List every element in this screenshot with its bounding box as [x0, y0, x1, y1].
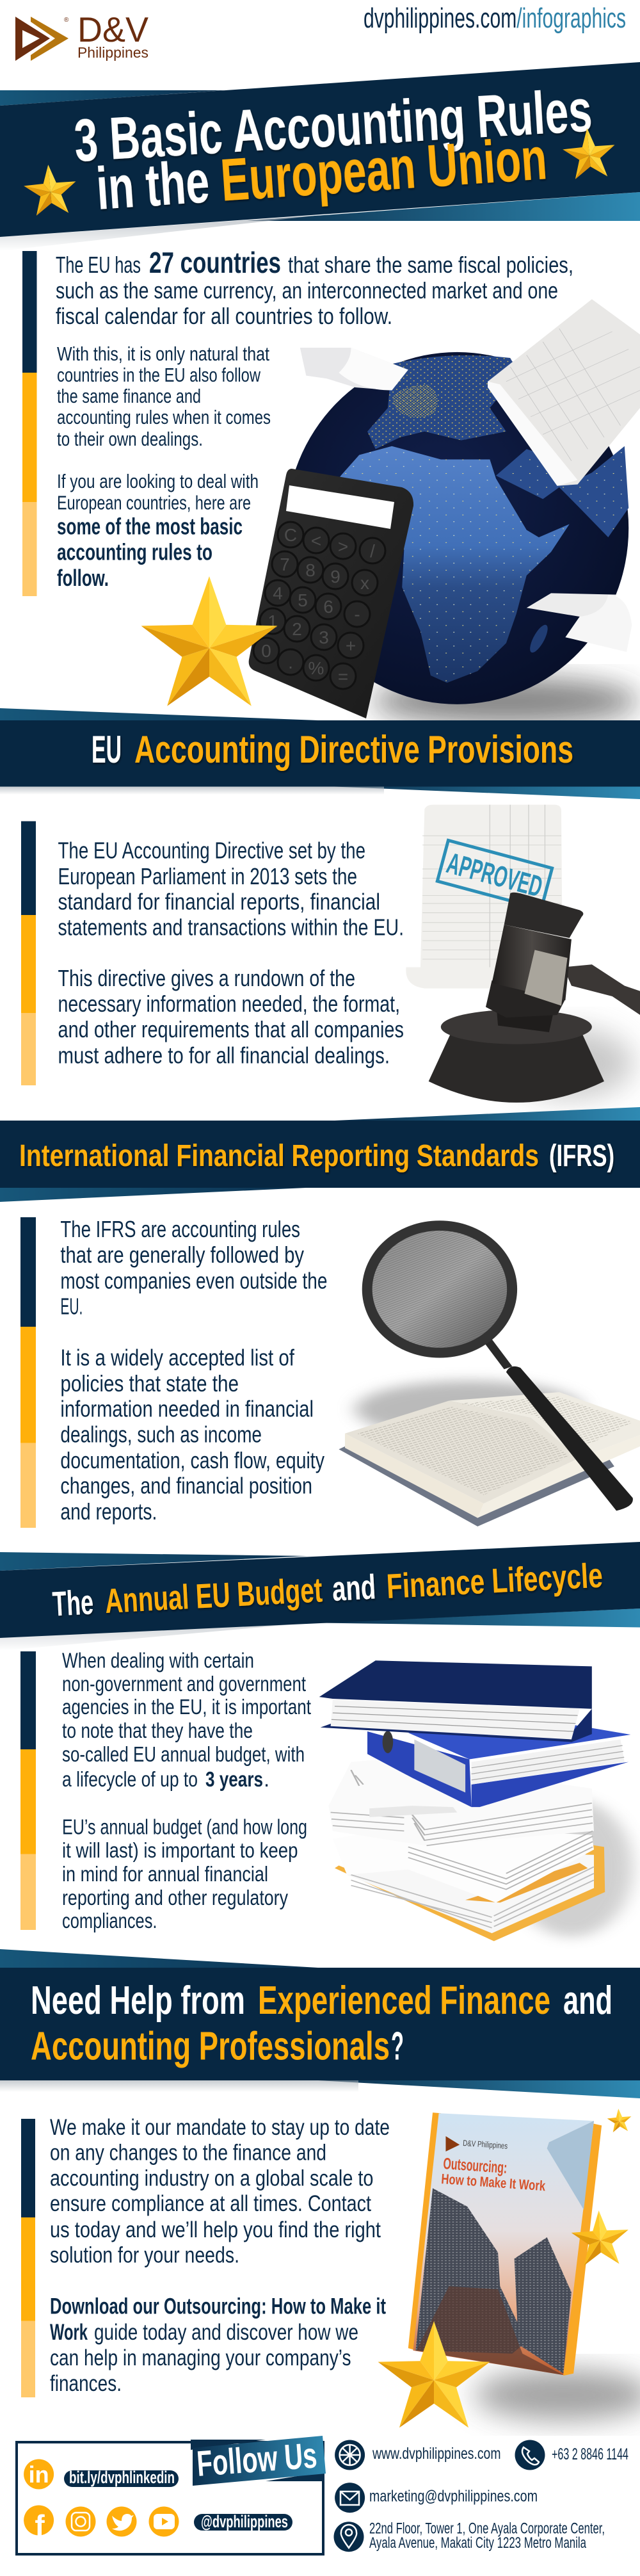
- illustration: guide book cover: [408, 2112, 640, 2420]
- illustration: stacked binders and papers: [319, 1660, 633, 1941]
- follow us box: [17, 2434, 326, 2554]
- heading: Annual EU Budget and Finance Lifecycle: [51, 1556, 604, 1624]
- linkedin link pill: bit.ly/dvphlinkedin: [69, 2468, 175, 2487]
- intro text: [56, 246, 573, 591]
- section 1 text: statements and transactions within the EU.: [58, 914, 404, 941]
- intro text: to their own dealings.: [57, 428, 203, 450]
- section 2 text: most companies even outside the: [60, 1268, 327, 1293]
- section 2 text: that are generally followed by: [60, 1242, 304, 1268]
- section 3 text: agencies in the EU, it is important: [62, 1695, 311, 1719]
- intro text: European countries, here are: [57, 492, 251, 514]
- heading: Need Help from Experienced Finance and Accounting Professionals?: Accounting Professionals: [31, 2025, 390, 2068]
- section 1 text: standard for financial reports, financial: [58, 889, 380, 914]
- section 3 text: [62, 1648, 311, 1932]
- section 3 text: in mind for annual financial: [62, 1862, 268, 1886]
- navy binder: [319, 1660, 592, 1742]
- contact: email: marketing@dvphilippines.com: [369, 2488, 538, 2506]
- section 1 text: and other requirements that all companies: [58, 1016, 404, 1042]
- section 3 text: compliances.: [62, 1909, 157, 1932]
- contact: email: [335, 2483, 538, 2513]
- book logo text: D&V Philippines: [463, 2138, 508, 2151]
- intro text: accounting rules when it comes: [57, 406, 271, 428]
- section 4 text: solution for your needs.: [50, 2243, 239, 2268]
- heading: Annual EU Budget and Finance Lifecycle: and: [331, 1568, 377, 1608]
- icon: facebook: f: [35, 2509, 45, 2542]
- section 3 text: so-called EU annual budget, with: [62, 1742, 305, 1766]
- calculator: <: [311, 531, 321, 551]
- handle pill: @dvphilippines: [201, 2512, 288, 2531]
- icon: twitter: [106, 2506, 137, 2537]
- section 1 text: necessary information needed, the format,: [58, 991, 400, 1017]
- book title: [441, 2155, 547, 2194]
- section 1 text: European Parliament in 2013 sets the: [58, 863, 357, 889]
- intro text: If you are looking to deal with: [57, 470, 259, 492]
- heading: IFRS: International Financial Reporting Standards: [19, 1139, 539, 1173]
- section 2 text: policies that state the: [60, 1370, 239, 1397]
- section 4 text: guide today and discover how we: [94, 2320, 358, 2345]
- header logo: D&V Philippines: [15, 10, 148, 61]
- section 1 text: must adhere to for all financial dealings.: [58, 1042, 390, 1068]
- heading: Need Help from Experienced Finance and Accounting Professionals?: Need Help from: [31, 1979, 245, 2023]
- section 2 text: changes, and financial position: [60, 1473, 312, 1499]
- blue binder: [367, 1722, 630, 1807]
- calculator: x: [360, 573, 369, 593]
- section 2 text: [60, 1216, 327, 1525]
- intro text: countries in the EU also follow: [57, 364, 260, 386]
- paper top left: [300, 348, 408, 391]
- calculator: C: [284, 525, 297, 545]
- intro text: accounting rules to: [57, 539, 212, 565]
- intro text: The EU has: [56, 252, 141, 278]
- calculator: 8: [305, 560, 316, 580]
- illustration: globe with calculator, papers: [249, 299, 640, 724]
- linkedin link pill: [64, 2468, 179, 2487]
- heading: Annual EU Budget and Finance Lifecycle: The: [51, 1583, 95, 1624]
- handle pill: [194, 2512, 292, 2531]
- calculator: 5: [298, 590, 308, 610]
- heading: EU Accounting Directive Provisions: EU: [92, 728, 122, 771]
- section 3 text: .: [264, 1767, 269, 1791]
- section band: EU Accounting Directive Provisions: [0, 708, 640, 799]
- calculator: 7: [280, 555, 290, 574]
- section 1 text: The EU Accounting Directive set by the: [58, 838, 365, 863]
- illustration: approved document and gavel: [406, 805, 640, 1103]
- approved stamp: [437, 840, 552, 909]
- section 3 text: non-government and government: [62, 1672, 306, 1696]
- calculator: %: [308, 658, 324, 678]
- section 3 text: EU’s annual budget (and how long: [62, 1815, 307, 1838]
- calculator: 4: [273, 583, 283, 603]
- calculator: 3: [319, 628, 329, 647]
- icon: facebook: [24, 2505, 54, 2542]
- section 4 text: accounting industry on a global scale to: [50, 2166, 374, 2191]
- contact: website: www.dvphilippines.com: [372, 2445, 500, 2463]
- section 3 text: it will last) is important to keep: [62, 1838, 298, 1862]
- section 2 text: EU.: [60, 1293, 83, 1320]
- approved stamp: APPROVED: [444, 846, 546, 903]
- section 3 text: reporting and other regulatory: [62, 1886, 288, 1909]
- calculator: .: [288, 652, 293, 672]
- heading: Need Help from Experienced Finance and Accounting Professionals?: [31, 1979, 612, 2068]
- section 4 text: Download our Outsourcing: How to Make it: [50, 2294, 386, 2319]
- icon: instagram: [65, 2506, 96, 2537]
- calculator: 9: [330, 567, 340, 587]
- book shadow: [474, 2369, 640, 2420]
- section band: Annual EU Budget: [0, 1542, 640, 1651]
- icon: medium star: [570, 2209, 630, 2266]
- gavel: [429, 893, 640, 1103]
- heading: Need Help from Experienced Finance and Accounting Professionals?: and: [563, 1979, 612, 2023]
- section 2 text: The IFRS are accounting rules: [60, 1216, 300, 1242]
- follow us banner: Follow Us: [195, 2434, 318, 2484]
- heading: Annual EU Budget and Finance Lifecycle: Annual EU Budget: [104, 1571, 323, 1621]
- section 3 text: 3 years: [205, 1767, 263, 1791]
- intro colour bar: [22, 251, 37, 596]
- section 4 text: Work: [50, 2320, 88, 2345]
- section 2 text: It is a widely accepted list of: [60, 1345, 295, 1371]
- calculator: +: [346, 636, 356, 656]
- paper stacks: [328, 1760, 594, 1902]
- title banner: [0, 62, 640, 251]
- contact: address: [334, 2520, 605, 2552]
- calculator: -: [354, 604, 360, 624]
- intro text: that share the same fiscal policies,: [288, 252, 573, 278]
- calculator: /: [370, 541, 375, 561]
- calculator: [249, 469, 413, 718]
- heading: IFRS: (IFRS): [549, 1139, 614, 1173]
- icon: big star on intro: [141, 576, 278, 706]
- follow us banner: [191, 2434, 326, 2486]
- heading: Need Help from Experienced Finance and Accounting Professionals?: ?: [391, 2025, 404, 2068]
- book title: Outsourcing:: [443, 2155, 508, 2177]
- intro text: the same finance and: [57, 385, 201, 407]
- approved document: [406, 805, 563, 989]
- section 2 text: documentation, cash flow, equity: [60, 1447, 324, 1473]
- gavel shadow: [506, 1028, 634, 1098]
- section 4 text: can help in managing your company’s: [50, 2345, 351, 2370]
- open book: [339, 1381, 640, 1527]
- icon: linkedin: [24, 2459, 54, 2490]
- paper bottom right: [527, 593, 632, 652]
- icon: small star: [606, 2107, 632, 2133]
- section 3 text: When dealing with certain: [62, 1648, 254, 1673]
- header logo: D&V Philippines: Philippines: [77, 44, 148, 61]
- section 1 text: This directive gives a rundown of the: [58, 965, 355, 991]
- icon: linkedin: in: [29, 2461, 49, 2488]
- section 2 text: information needed in financial: [60, 1396, 314, 1422]
- section 3 colour bar: [20, 1651, 36, 1930]
- contact: website: [335, 2440, 500, 2470]
- section 2 text: and reports.: [60, 1498, 157, 1525]
- globe shadow: [371, 678, 640, 724]
- icon: title star left: [22, 163, 79, 216]
- section 4 text: finances.: [50, 2371, 122, 2396]
- section band: IFRS: [0, 1107, 640, 1202]
- section 1 text: [58, 838, 404, 1068]
- calculator: 1: [268, 612, 278, 631]
- yellow folder: [335, 1843, 605, 1941]
- section 4 text: ensure compliance at all times. Contact: [50, 2191, 371, 2216]
- section 1 colour bar: [21, 821, 36, 1085]
- calculator: 0: [261, 641, 271, 661]
- paper top right: [488, 299, 640, 486]
- section 4 text: on any changes to the finance and: [50, 2140, 326, 2165]
- intro text: fiscal calendar for all countries to follow.: [56, 303, 392, 329]
- calculator: >: [338, 537, 348, 556]
- section band: Need Help: [0, 1949, 640, 2098]
- book title: How to Make It Work: [441, 2171, 547, 2194]
- icon: title star right: [561, 126, 618, 180]
- section 4 text: us today and we’ll help you find the right: [50, 2217, 381, 2242]
- section 4 text: We make it our mandate to stay up to date: [50, 2115, 390, 2140]
- icon: large star: [378, 2321, 490, 2427]
- illustration: magnifying glass over open book: [339, 1220, 640, 1527]
- header logo: D&V Philippines: D&V: [77, 10, 148, 49]
- calculator: 2: [292, 619, 302, 639]
- intro text: follow.: [57, 565, 109, 591]
- intro text: 27 countries: [149, 246, 281, 279]
- intro text: With this, it is only natural that: [57, 343, 269, 365]
- section 3 text: to note that they have the: [62, 1719, 253, 1742]
- intro text: some of the most basic: [57, 514, 243, 539]
- calculator screen: [286, 485, 394, 529]
- header logo: D&V Philippines: ®: [64, 17, 69, 24]
- section 3 text: a lifecycle of up to: [62, 1767, 198, 1791]
- binders shadow: [510, 1799, 633, 1937]
- section 4 colour bar: [21, 2119, 35, 2397]
- section 2 text: dealings, such as income: [60, 1422, 262, 1448]
- section 2 colour bar: [20, 1217, 36, 1528]
- calculator: =: [338, 667, 348, 686]
- icon: youtube: [148, 2506, 179, 2537]
- section 4 text: [50, 2115, 390, 2396]
- contact: phone: [515, 2440, 628, 2470]
- magnifying glass: [362, 1220, 633, 1511]
- calculator: 6: [323, 597, 333, 617]
- globe: [285, 352, 628, 704]
